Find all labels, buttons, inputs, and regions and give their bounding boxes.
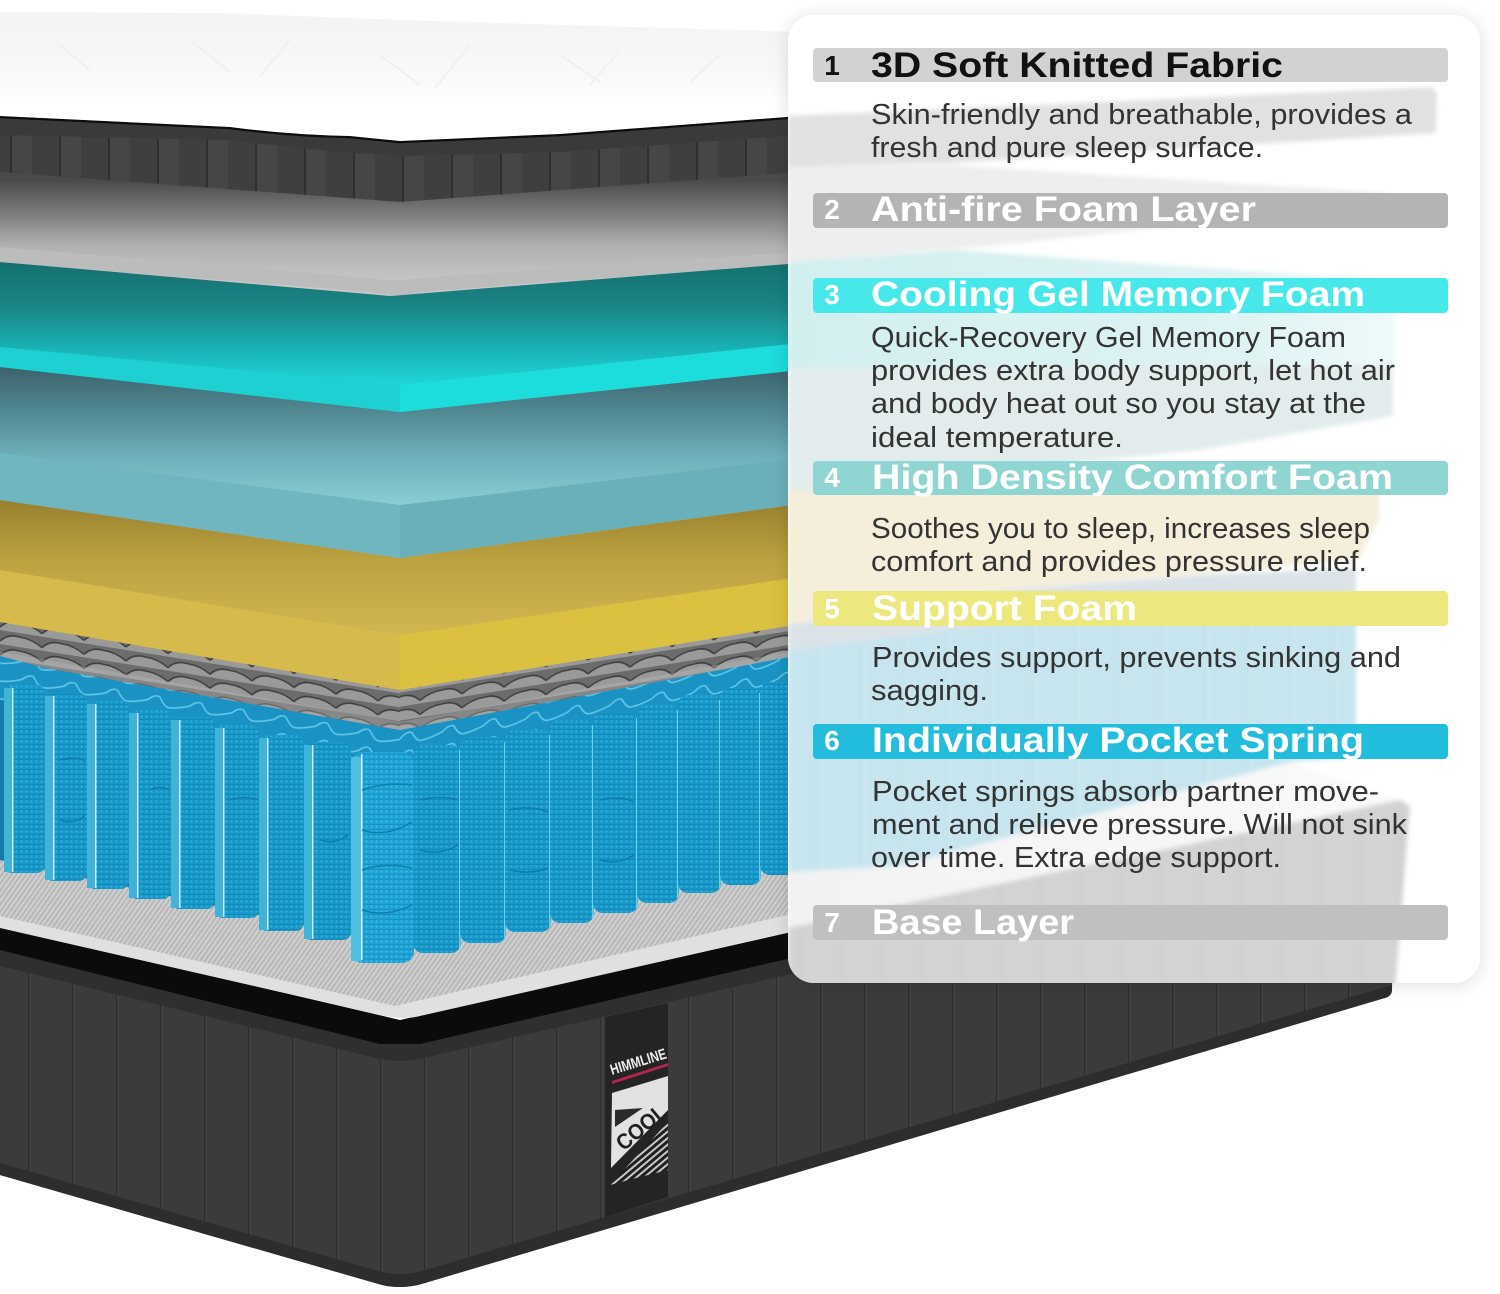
- layer 4: high density comfort foam: 4: [824, 462, 840, 493]
- description 1: fresh and pure sleep surface.: [871, 132, 1263, 164]
- description 6: ment and relieve pressure. Will not sink: [872, 809, 1408, 841]
- dark quilted border band: [0, 117, 800, 202]
- layer 2: anti-fire foam layer: 2: [824, 194, 840, 225]
- tag red rule: [612, 1063, 668, 1084]
- layer 6: individually pocket spring: Individually Pocket Spring: [872, 721, 1364, 760]
- base label tag: [605, 1003, 671, 1217]
- layer 7: base layer: [813, 903, 1448, 942]
- layer 7: base layer: Base Layer: [872, 903, 1074, 942]
- description 5: sagging.: [871, 675, 988, 707]
- faded mattress seen through the panel: [788, 87, 1448, 990]
- description 4: Soothes you to sleep, increases sleep: [871, 513, 1370, 545]
- description 3: Quick-Recovery Gel Memory Foam: [871, 322, 1346, 354]
- tag dark triangle: [615, 1108, 643, 1127]
- layer 3: cooling gel memory foam: [813, 275, 1448, 454]
- layer 6: individually pocket spring: [813, 721, 1448, 874]
- layer 1: 3D soft knitted fabric: 1: [824, 50, 840, 81]
- base layer: black strip under surface: [0, 926, 800, 1044]
- layer 5: support foam: 5: [824, 593, 840, 624]
- aqua high density comfort foam layer: [0, 340, 800, 558]
- layer 3: cooling gel memory foam: 3: [824, 279, 840, 310]
- layer 1: 3D soft knitted fabric: [813, 46, 1448, 164]
- base layer: woven top surface: [0, 850, 800, 1018]
- pocket springs: blue middle row tops: [0, 655, 800, 800]
- description 1: Skin-friendly and breathable, provides a: [871, 99, 1413, 131]
- tag cool wordmark: COOL: [611, 1099, 671, 1155]
- layer 5: support foam: [813, 589, 1448, 707]
- layer 1: 3D soft knitted fabric: 3D Soft Knitted Fabric: [871, 46, 1283, 85]
- grey anti-fire foam layer: [0, 170, 800, 296]
- layer 6: individually pocket spring: 6: [824, 725, 840, 756]
- translucent description panel: [788, 15, 1480, 990]
- base layer: dark quilted side: [0, 800, 1409, 1287]
- description 5: Provides support, prevents sinking and: [872, 642, 1401, 674]
- cyan cooling gel memory foam layer: [0, 240, 800, 412]
- tag brand name: HIMMLINE: [608, 1046, 669, 1079]
- pocket springs: front row of blue coils: [0, 682, 801, 963]
- panel card: [788, 15, 1480, 983]
- description 3: and body heat out so you stay at the: [871, 388, 1366, 420]
- layer 5: support foam: Support Foam: [872, 589, 1137, 628]
- description 3: provides extra body support, let hot air: [871, 355, 1395, 387]
- yellow support foam layer: [0, 480, 800, 690]
- layer 4: high density comfort foam: High Density Comfort Foam: [872, 458, 1393, 497]
- tag white cool badge: [611, 1076, 668, 1168]
- layer 4: high density comfort foam: [813, 458, 1448, 578]
- tag chevron stripes: [610, 1122, 668, 1185]
- description 3: ideal temperature.: [871, 422, 1123, 454]
- pocket springs: grey back row tops: [0, 616, 800, 762]
- description 6: over time. Extra edge support.: [871, 842, 1281, 874]
- layer 7: base layer: 7: [824, 907, 840, 938]
- description 4: comfort and provides pressure relief.: [871, 546, 1367, 578]
- layer 3: cooling gel memory foam: Cooling Gel Memory Foam: [871, 275, 1365, 314]
- layer 2: anti-fire foam layer: Anti-fire Foam Layer: [871, 190, 1256, 229]
- white knitted top fabric: [0, 12, 800, 141]
- description 6: Pocket springs absorb partner move-: [872, 776, 1379, 808]
- layer 2: anti-fire foam layer: [813, 190, 1448, 229]
